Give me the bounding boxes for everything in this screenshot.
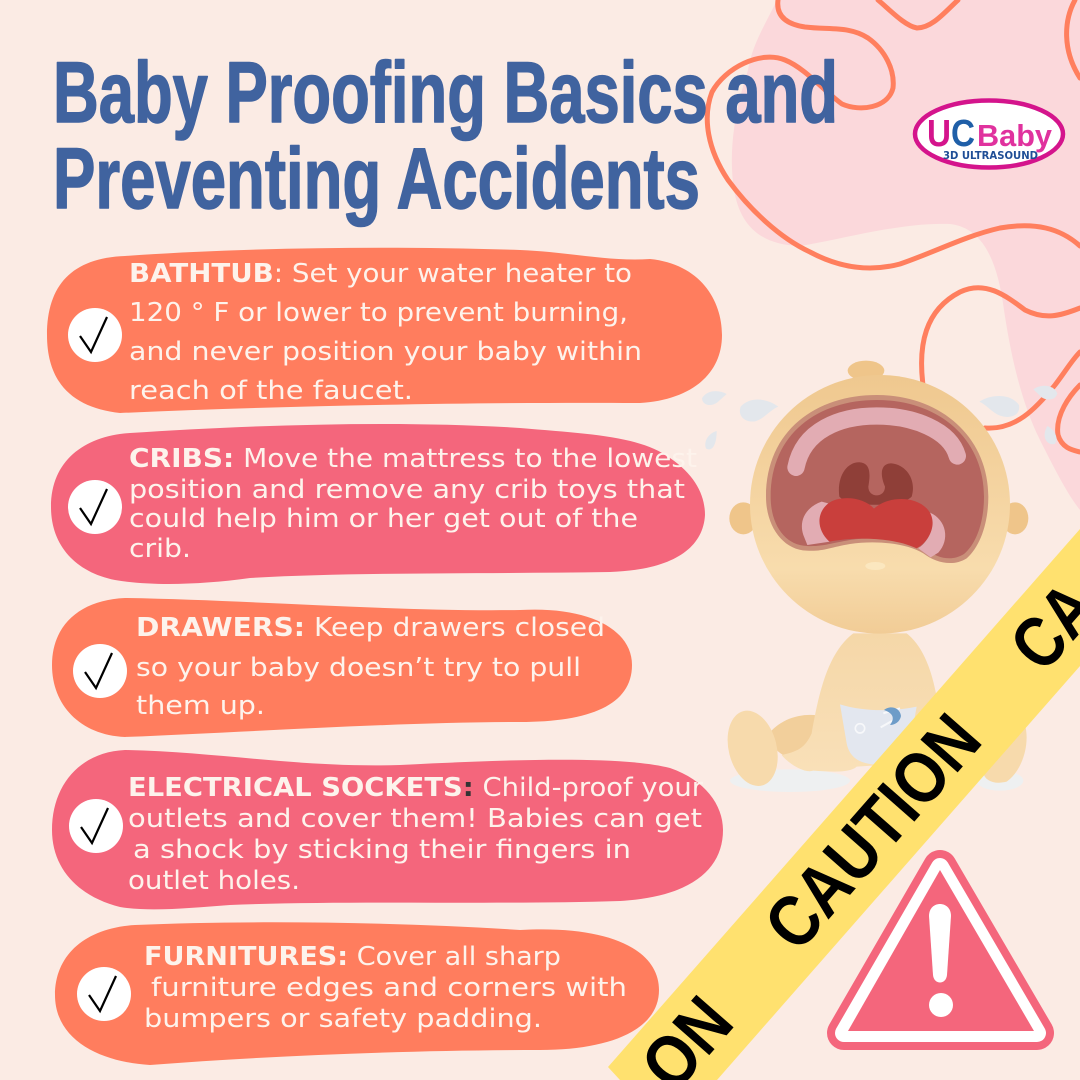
furnitures text: bumpers or safety padding.: [144, 1004, 542, 1034]
drawers text: so your baby doesn’t try to pull: [136, 653, 581, 683]
drawers text: DRAWERS: Keep drawers closed: [136, 613, 605, 643]
caution tape: [608, 529, 1080, 1080]
panel: furnitures: [55, 922, 659, 1065]
baby illustration: [702, 361, 1057, 792]
title: [53, 45, 838, 227]
bathtub text: [129, 259, 642, 406]
cribs text: [129, 444, 697, 564]
panel: electrical sockets: [52, 750, 723, 909]
logo: UC Baby 3D Ultrasound: UC: [927, 113, 975, 155]
title: Preventing Accidents: [53, 131, 700, 227]
warning triangle icon: [844, 867, 1037, 1033]
check icon: [73, 644, 127, 698]
diaper pin: [855, 707, 901, 733]
check icon: [68, 308, 122, 362]
nose highlight: [865, 562, 885, 570]
logo: UC Baby 3D Ultrasound: [915, 100, 1063, 168]
upper palate: [796, 416, 957, 467]
check icon: [68, 480, 122, 534]
electrical sockets text: [128, 773, 703, 896]
panel: bathtub: [47, 248, 722, 413]
ears and head tuft: [729, 361, 1028, 534]
logo: UC Baby 3D Ultrasound: 3D ULTRASOUND: [943, 149, 1038, 162]
electrical sockets text: outlets and cover them! Babies can get: [128, 804, 702, 834]
cribs text: crib.: [129, 534, 191, 564]
furnitures text: [144, 942, 627, 1034]
check icon: [77, 967, 131, 1021]
background pink shape: [732, 0, 1080, 510]
tape text: CAUTION: [750, 700, 997, 965]
check icon: [69, 799, 123, 853]
tongue: [819, 498, 933, 548]
electrical sockets text: outlet holes.: [128, 866, 300, 896]
panel: cribs: [51, 424, 705, 584]
bathtub text: BATHTUB : Set your water heater to: [129, 259, 632, 289]
legs and feet: [720, 705, 1027, 791]
furnitures text: furniture edges and corners with: [151, 973, 627, 1003]
throat and uvula: [839, 462, 913, 505]
panel: drawers: [52, 598, 632, 737]
head: [750, 375, 1010, 634]
cribs text: could help him or her get out of the: [129, 504, 638, 534]
electrical sockets text: a shock by sticking their fingers in: [133, 835, 631, 865]
bathtub text: reach of the faucet.: [129, 376, 413, 406]
decorative orange squiggle lines: [707, 0, 1080, 452]
drawers text: [136, 613, 605, 721]
electrical sockets text: ELECTRICAL SOCKETS : Child-proof your: [128, 773, 703, 803]
open mouth: [766, 395, 988, 563]
bathtub text: 120 ° F or lower to prevent burning,: [129, 298, 628, 328]
tape text: [626, 567, 1080, 1080]
diaper: [840, 704, 917, 765]
tears: [702, 386, 1057, 449]
bathtub text: and never position your baby within: [129, 337, 642, 367]
shadow under baby: [730, 769, 1023, 792]
cribs text: CRIBS: Move the mattress to the lowest: [129, 444, 697, 474]
drawers text: them up.: [136, 691, 265, 721]
furnitures text: FURNITURES: Cover all sharp: [144, 942, 561, 972]
side gums: [802, 502, 830, 545]
cribs text: position and remove any crib toys that: [129, 475, 685, 505]
logo: UC Baby 3D Ultrasound: Baby: [977, 118, 1053, 153]
torso and arm: [782, 633, 937, 772]
